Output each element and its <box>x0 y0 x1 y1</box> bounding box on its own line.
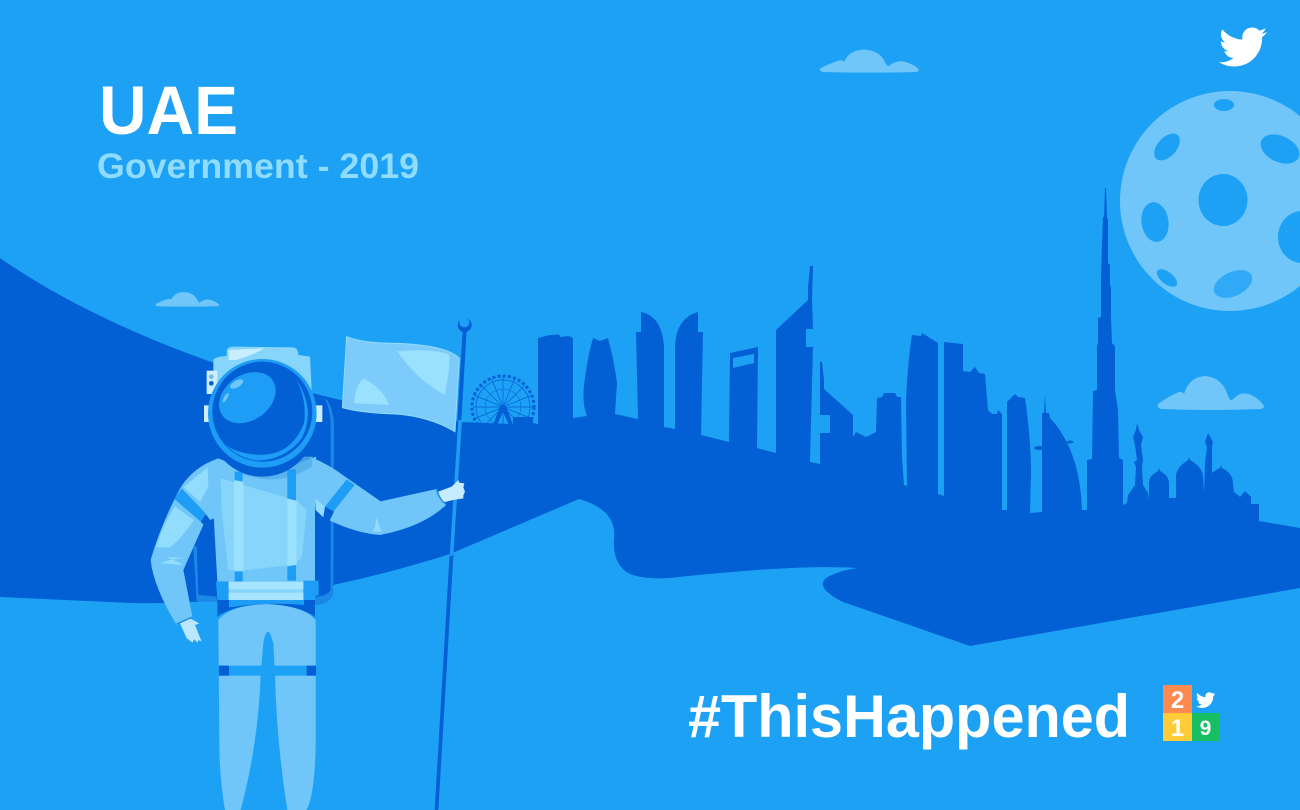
ferris wheel <box>472 376 534 438</box>
cloud: left <box>155 292 219 307</box>
legs <box>218 604 317 810</box>
Burj Al Arab helipad <box>1034 440 1074 450</box>
hashtag: #ThisHappened: #ThisHappened <box>688 683 1130 750</box>
torso <box>213 457 316 582</box>
icon: twitter bird <box>1219 27 1267 67</box>
2019 logo <box>1163 685 1219 742</box>
right arm <box>310 457 446 535</box>
2019 logo: 1 <box>1171 715 1184 742</box>
2019 logo: 9 <box>1200 717 1211 740</box>
helmet <box>204 347 322 477</box>
subtitle: Government - 2019: Government - 2019 <box>97 146 419 186</box>
hill and city skyline silhouette <box>0 188 1300 646</box>
astronaut with flag <box>151 317 472 810</box>
belt <box>216 581 319 617</box>
cloud: top <box>820 50 919 73</box>
moon <box>1120 91 1300 311</box>
left arm <box>151 458 218 625</box>
cloud: right <box>1158 376 1264 410</box>
backpack <box>193 397 334 605</box>
flag <box>342 337 459 432</box>
title: UAE: UAE <box>99 72 238 149</box>
hands <box>177 480 465 643</box>
flag pole <box>435 317 472 810</box>
2019 logo: 2 <box>1171 687 1184 714</box>
